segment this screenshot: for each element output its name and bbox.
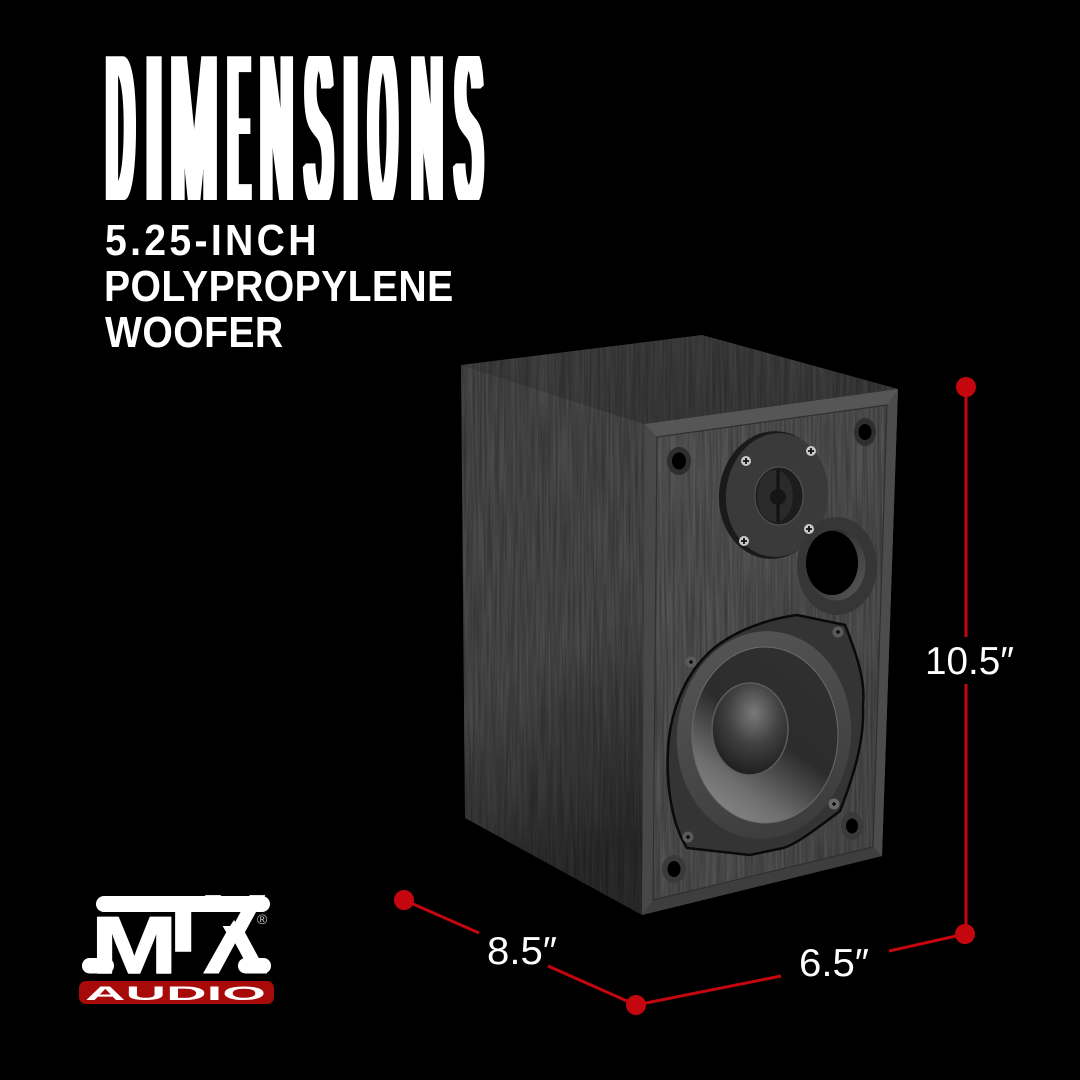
cabinet top panel: [462, 335, 898, 424]
speaker cabinet: [455, 330, 905, 920]
logo wordmark: M: [91, 900, 177, 990]
woofer: [667, 615, 864, 855]
logo wordmark: X: [203, 872, 267, 998]
screws: [682, 446, 844, 842]
title: O: [370, 3, 396, 255]
title: S: [306, 8, 332, 250]
woofer surround: [667, 622, 861, 848]
title: I: [343, 13, 358, 245]
infographic canvas: [79, 56, 1014, 1015]
dimension: width 6.5 inches: [626, 924, 975, 1015]
dimension: depth 8.5 inches: [394, 890, 636, 1005]
logo wordmark: [82, 872, 271, 998]
title: M: [171, 13, 217, 245]
dimension: width 6.5 inches: 6.5″: [799, 942, 869, 985]
title: E: [229, 11, 249, 245]
dimension: height 10.5 inches: [925, 377, 1014, 934]
cabinet side panel: [455, 360, 650, 920]
subtitle: WOOFER: [105, 308, 283, 356]
dimension: depth 8.5 inches: 8.5″: [487, 930, 557, 973]
title: S: [456, 8, 482, 250]
logo audio badge: AUDIO: [85, 984, 266, 1005]
mounting holes: [662, 418, 876, 883]
tweeter: [713, 426, 834, 564]
title: N: [261, 10, 292, 244]
subtitle: 5.25-INCH: [105, 216, 317, 264]
subtitle: [104, 216, 453, 356]
MTX Audio logo: [79, 872, 274, 1005]
title: D: [107, 10, 133, 245]
registered mark: ®: [257, 911, 268, 927]
bass port: [797, 517, 877, 615]
dimension: height 10.5 inches: 10.5″: [925, 640, 1014, 683]
title: N: [412, 11, 442, 244]
logo audio badge: [79, 981, 274, 1005]
woofer flange: [668, 615, 864, 855]
woofer cone: [692, 647, 838, 823]
logo wordmark: T: [153, 882, 213, 967]
subtitle: POLYPROPYLENE: [104, 262, 453, 310]
title: [106, 56, 484, 200]
woofer dust cap: [712, 683, 788, 775]
title: I: [145, 11, 163, 244]
cabinet front panel: [640, 385, 902, 920]
